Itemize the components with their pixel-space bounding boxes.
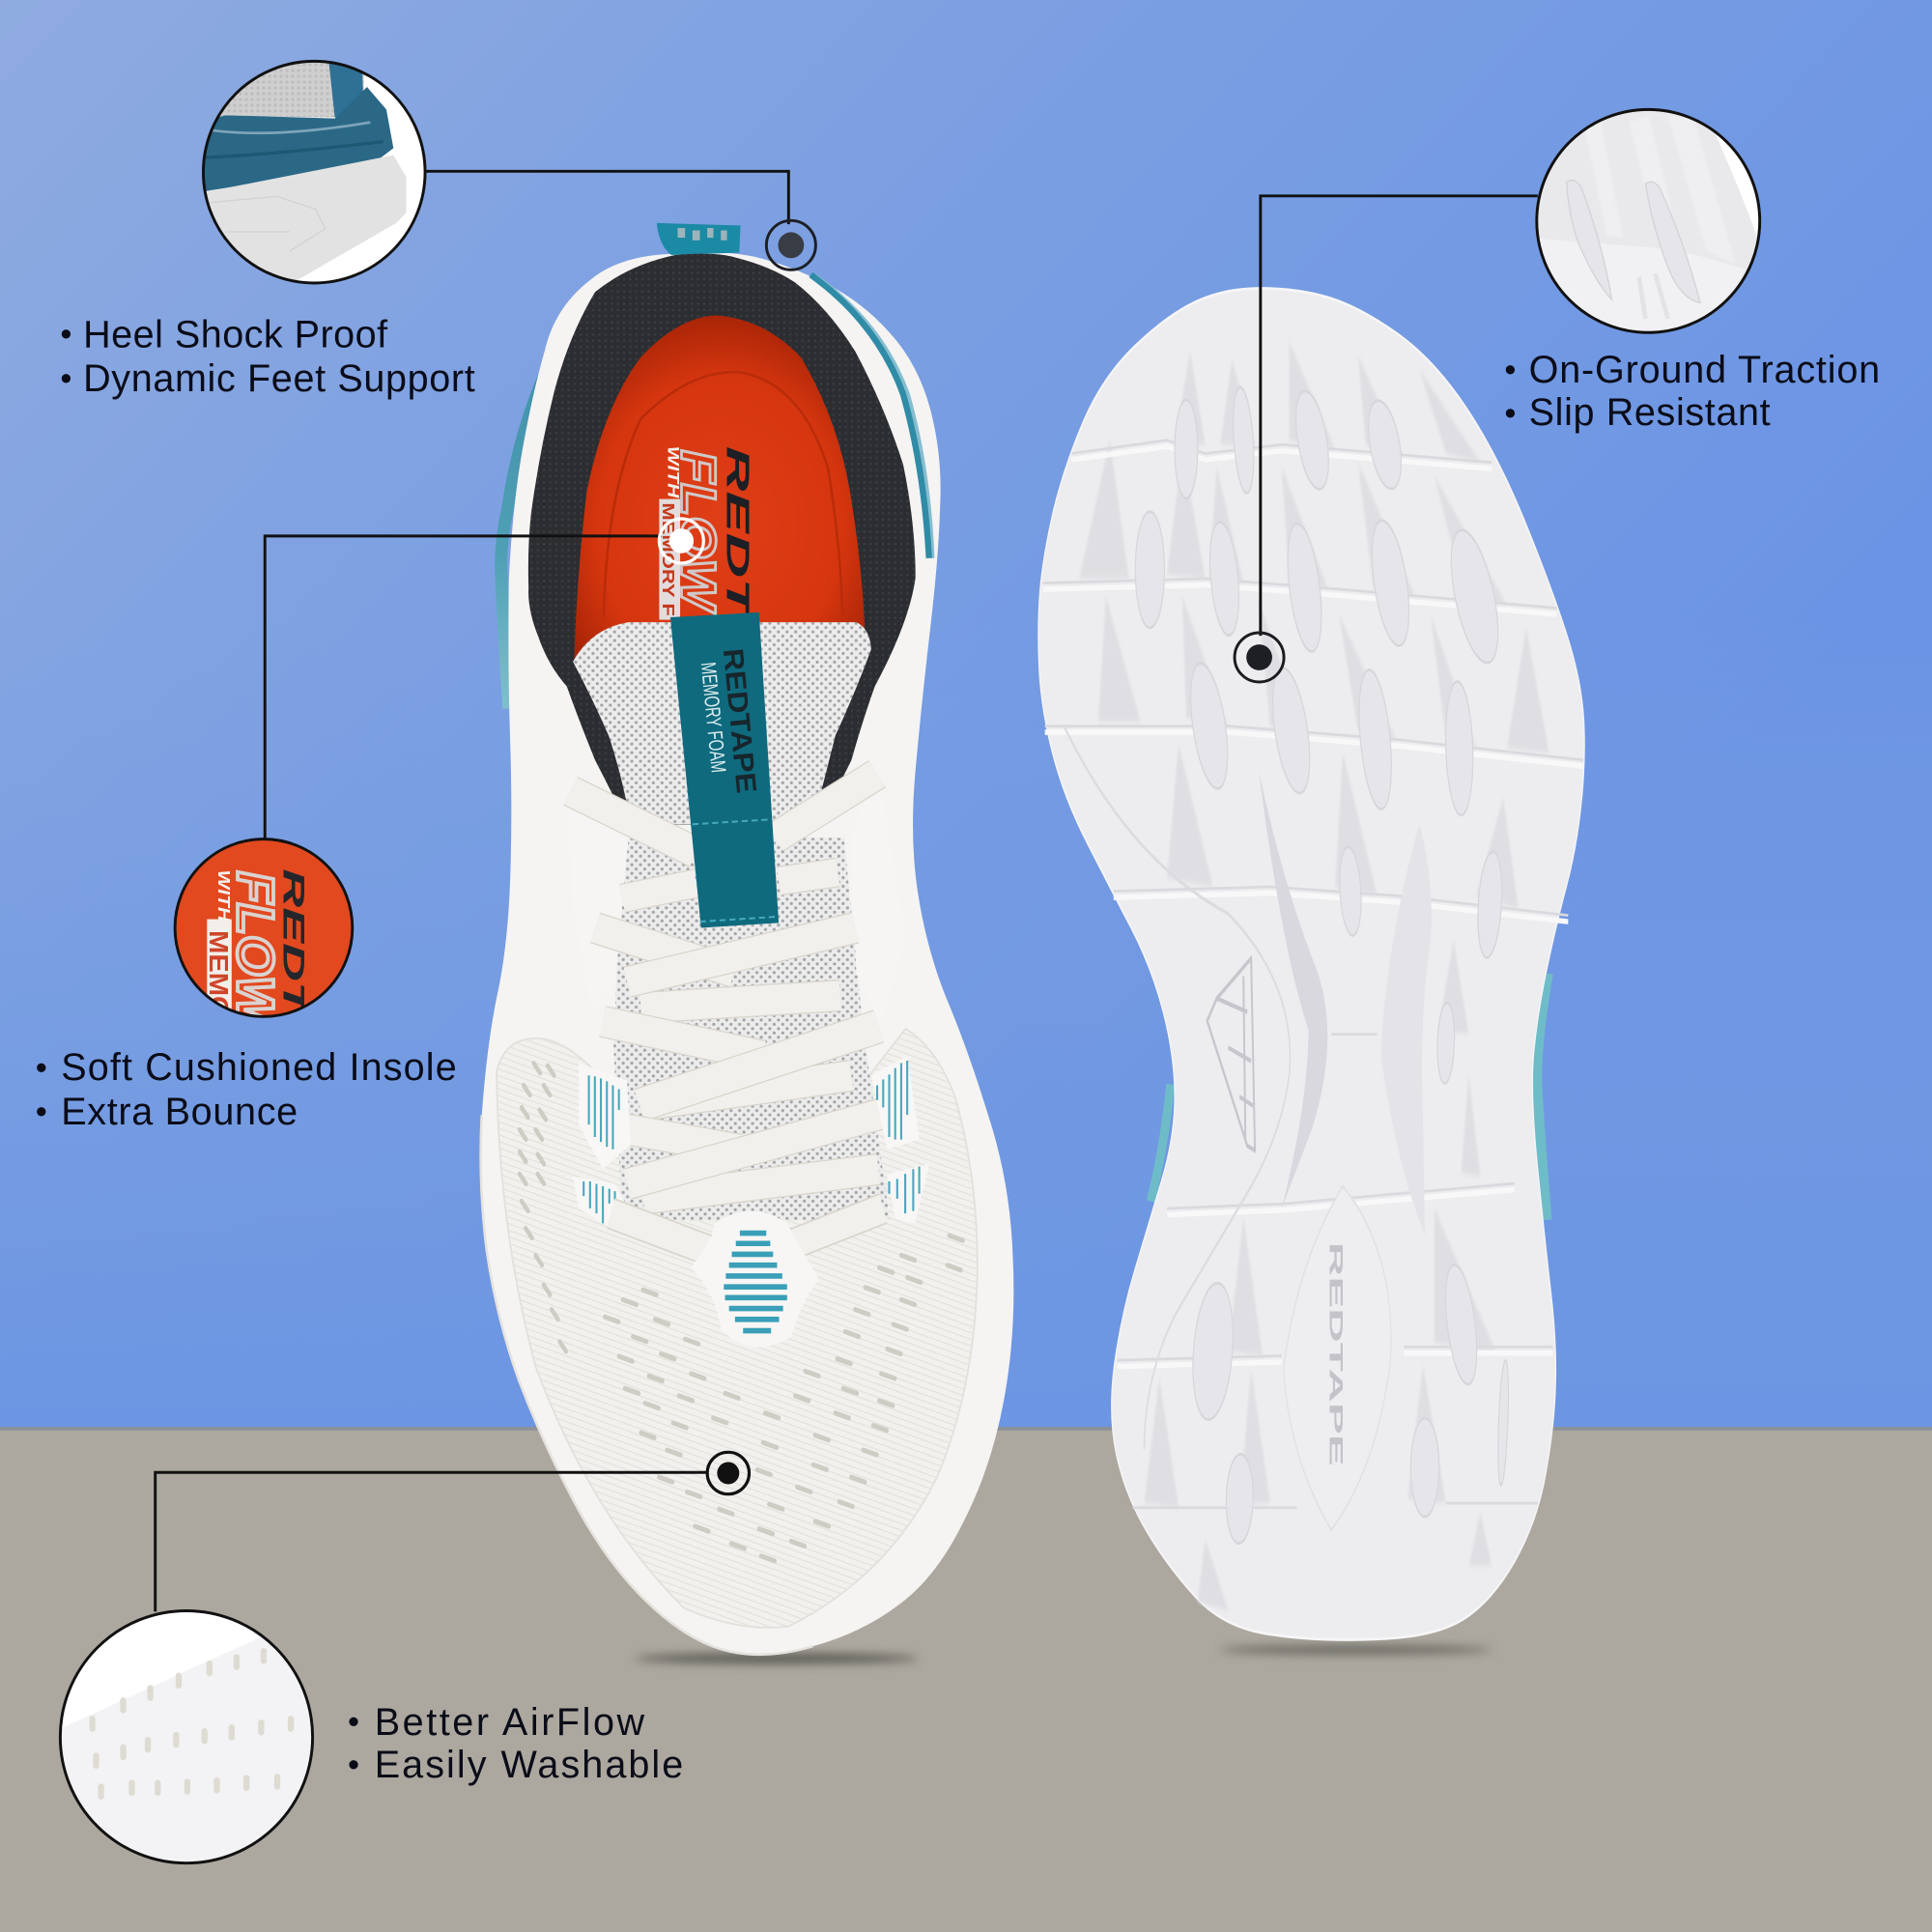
feature text	[1504, 349, 1880, 434]
shoe top view	[481, 223, 1013, 1655]
shoe sole view	[1038, 288, 1584, 1639]
toe logo oval	[1284, 1186, 1391, 1530]
target marker	[707, 1452, 750, 1494]
feature text: Extra Bounce	[61, 1091, 298, 1133]
feature text	[60, 314, 475, 400]
feature text: •	[1504, 352, 1516, 388]
feature text: •	[36, 1094, 47, 1130]
feature text: •	[348, 1703, 359, 1740]
arch groove	[1259, 771, 1327, 1208]
zoom circle: MEMORY	[204, 930, 234, 1056]
zoom circle: REDT	[276, 868, 311, 1018]
target marker	[766, 220, 815, 270]
background wall	[0, 0, 1932, 1430]
laces	[571, 774, 895, 1199]
upper foam rim shading	[481, 1115, 813, 1655]
feature text: •	[36, 1050, 47, 1087]
feature text: •	[1504, 395, 1516, 432]
collar lining	[528, 254, 916, 824]
lower laces	[611, 1213, 715, 1253]
toe perforations	[520, 1064, 963, 1561]
shoe upper	[481, 252, 1013, 1655]
ridge highlights	[1043, 446, 1583, 1367]
teal right side trim	[810, 274, 933, 558]
white overlays	[573, 1056, 929, 1226]
forefoot groove	[1381, 824, 1432, 1236]
insole	[574, 316, 865, 666]
zoom circle	[55, 1589, 313, 1863]
eyelet stripe panels	[573, 1056, 929, 1348]
connector	[265, 536, 662, 839]
zoom circle	[174, 838, 354, 1018]
feature text	[348, 1701, 683, 1786]
connector	[1261, 196, 1538, 636]
sole tread	[1038, 288, 1584, 1639]
feature text: Easily Washable	[375, 1744, 683, 1786]
callout: better airflow	[55, 1452, 750, 1863]
toe badge stripes	[724, 1234, 787, 1331]
connector	[156, 1472, 707, 1611]
callout: on-ground traction	[1235, 109, 1880, 682]
feature text: Dynamic Feet Support	[83, 357, 475, 400]
zoom circle: WITH	[214, 870, 234, 923]
feature text: Heel Shock Proof	[83, 314, 388, 356]
toe mesh panel	[497, 1029, 978, 1628]
zoom circle	[1536, 109, 1765, 332]
callout: heel shock proof	[60, 51, 815, 400]
teal tongue tab	[670, 612, 779, 927]
feature text: Soft Cushioned Insole	[61, 1046, 457, 1089]
teal left side trim	[501, 323, 571, 708]
feature text: Better AirFlow	[375, 1701, 645, 1744]
feature text: •	[348, 1747, 359, 1783]
feature text: •	[60, 360, 71, 397]
target marker	[659, 519, 703, 563]
feature text: On-Ground Traction	[1529, 349, 1880, 391]
thin outline	[1064, 726, 1290, 1450]
wall lower tone	[0, 616, 1932, 1430]
teal stripes	[583, 1061, 920, 1223]
feature text: Slip Resistant	[1529, 391, 1771, 434]
shoe shadows	[635, 1645, 1491, 1663]
wing logo	[1208, 958, 1255, 1151]
callout: soft cushioned insole	[36, 519, 703, 1133]
zoom circle: FLOW	[226, 871, 283, 1030]
insole memory text: MEMORY F	[659, 502, 678, 616]
side panels	[567, 764, 906, 1023]
insole brand: REDT	[720, 446, 755, 621]
tongue	[573, 622, 871, 824]
insole inner contour	[604, 372, 842, 616]
connector	[425, 171, 788, 224]
floor edge	[0, 1427, 1932, 1431]
insole script: FLOW	[670, 450, 725, 614]
tab brand: REDTAPE	[717, 647, 762, 795]
teal midsole peek	[1151, 974, 1548, 1220]
tread pods	[1135, 378, 1510, 1546]
insole memory badge	[659, 499, 680, 620]
feature text	[36, 1046, 457, 1133]
tab subtitle: MEMORY FOAM	[696, 661, 731, 774]
tab stitching	[693, 819, 777, 922]
target marker	[1235, 633, 1284, 682]
floor	[0, 1430, 1932, 1932]
ridge lines	[1043, 440, 1583, 1508]
toe badge	[691, 1211, 819, 1348]
insole with: WITH	[664, 446, 682, 499]
mesh throat	[613, 838, 890, 1220]
feature text: •	[60, 316, 71, 353]
sole brand text: REDTAPE	[1324, 1242, 1345, 1466]
zoom circle	[190, 51, 425, 283]
groove wedges	[1079, 342, 1549, 1610]
heel pull tab	[657, 223, 741, 255]
sole outline	[1038, 288, 1584, 1639]
